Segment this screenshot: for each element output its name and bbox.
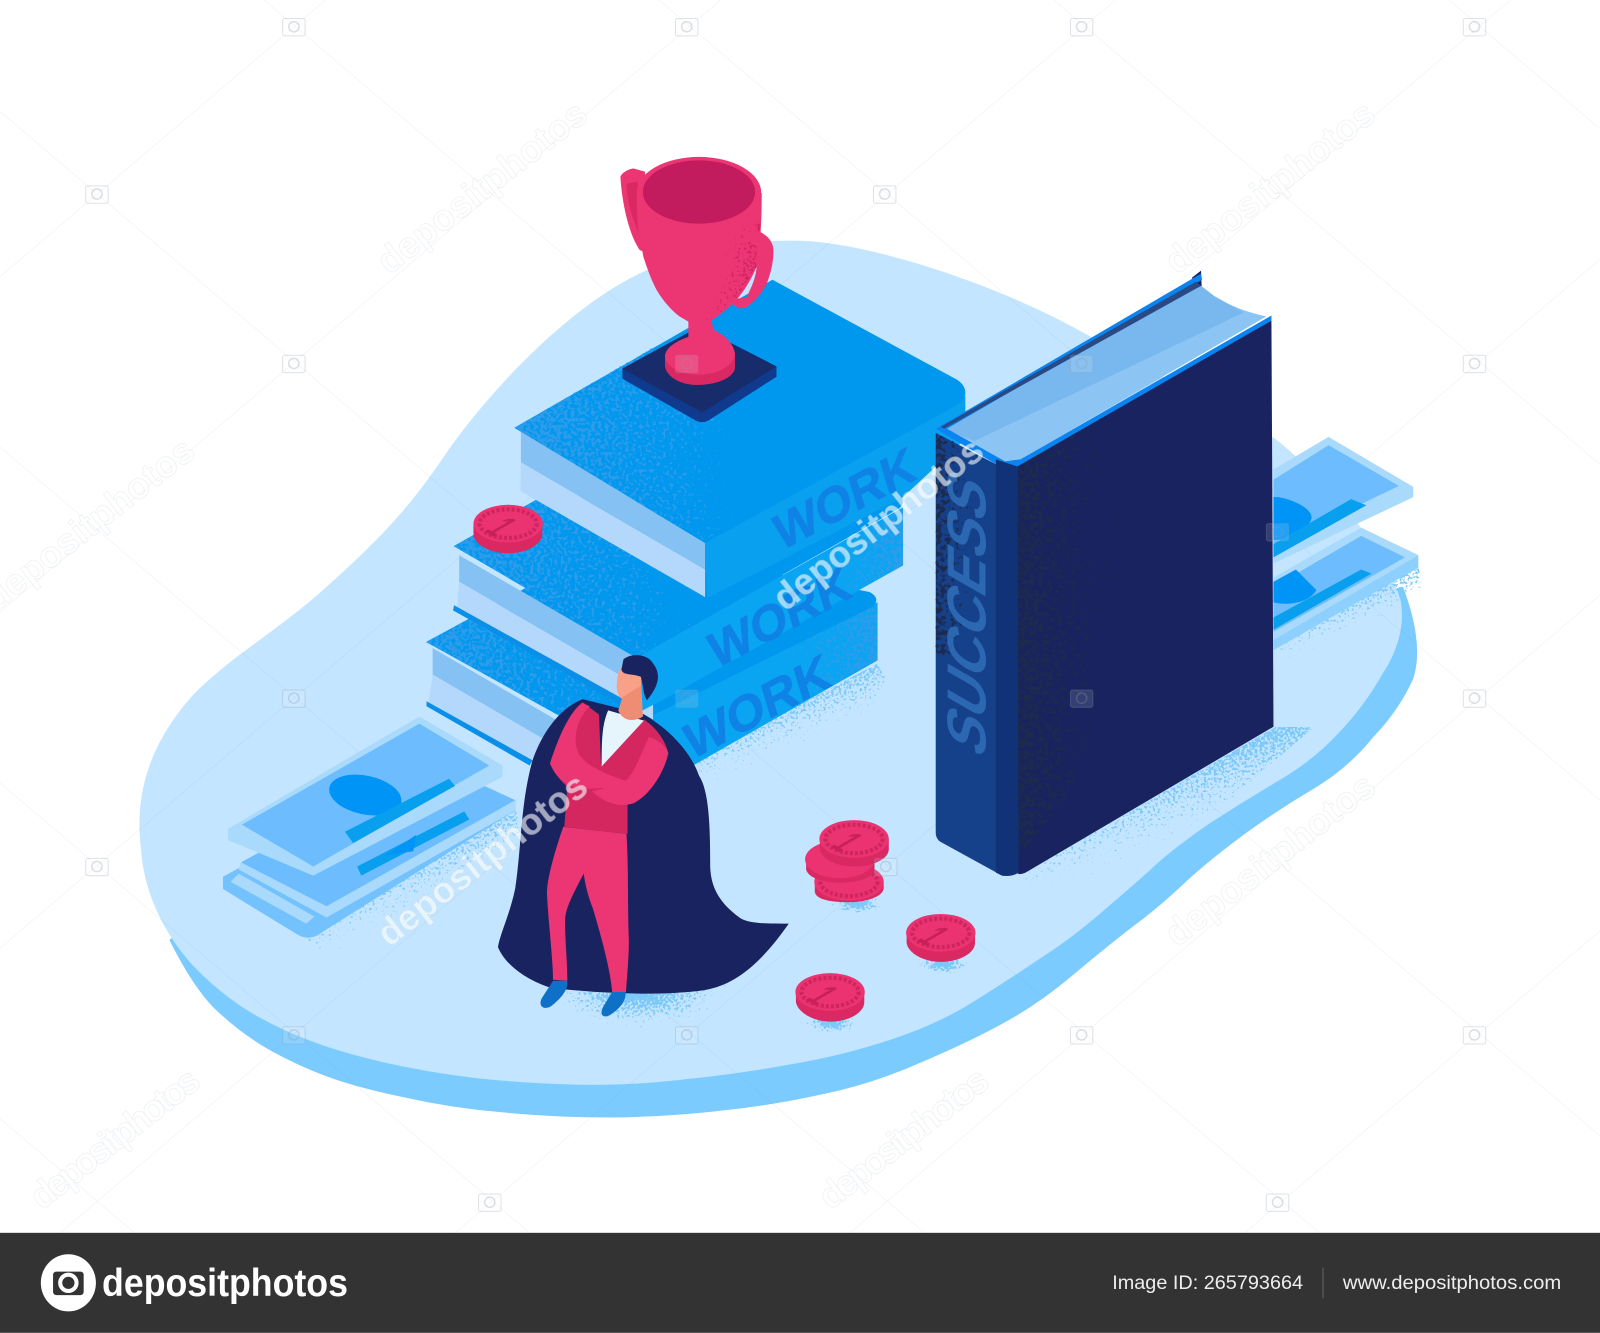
cup [637, 193, 762, 385]
back cover corner [1192, 271, 1202, 296]
neck and face [617, 668, 643, 720]
arm left [550, 703, 634, 803]
coin bottom: 1 [796, 980, 848, 1010]
watermark text: depositphotos [1157, 765, 1383, 954]
arm right [592, 737, 668, 805]
coin on middle book: 1 [475, 512, 527, 542]
watermark text: depositphotos [22, 1059, 208, 1217]
cover edge [936, 274, 1271, 469]
shirt [602, 710, 644, 766]
trophy plate [622, 327, 777, 422]
middle bill [239, 760, 515, 918]
superhero businessman [498, 655, 789, 1016]
spine [936, 433, 1018, 876]
spine label SUCCESS: SUCCESS [937, 459, 998, 767]
coin bottom [795, 973, 865, 1022]
money stack left [223, 716, 515, 938]
book stack [426, 280, 965, 786]
coin stack: 1 [821, 827, 873, 857]
background blob: upper layer [139, 241, 1402, 1085]
middle book [453, 490, 903, 720]
large SUCCESS book [936, 271, 1273, 876]
footer logo [41, 1254, 348, 1311]
footer logo: depositphotos [102, 1262, 348, 1305]
bill right upper [1273, 437, 1413, 563]
torso [550, 702, 668, 834]
handle left [620, 169, 653, 255]
coin right [906, 914, 976, 962]
page block [944, 286, 1266, 465]
footer image id: Image ID: 265793664 [1112, 1272, 1303, 1294]
coin stack [805, 820, 889, 902]
shoe left [541, 981, 567, 1008]
cape [498, 699, 789, 994]
coin on middle book [473, 505, 543, 553]
top book [514, 280, 965, 598]
watermark text: depositphotos [810, 1059, 997, 1217]
legs [547, 827, 629, 992]
lower bill [223, 776, 515, 938]
spine label WORK: WORK [768, 437, 921, 562]
watermark camera icons [86, 19, 1486, 1211]
front cover [1017, 321, 1273, 874]
watermark text: depositphotos [765, 429, 991, 619]
lower book [426, 541, 878, 786]
money stack right [1273, 437, 1418, 650]
footer url: www.depositphotos.com [1342, 1272, 1561, 1294]
spine label WORK: WORK [678, 644, 836, 771]
watermark text [0, 93, 1383, 1217]
light sliver through handle [740, 270, 752, 294]
watermark text: depositphotos [1157, 93, 1383, 282]
background blob: lower layer [169, 587, 1417, 1118]
trophy [620, 157, 773, 385]
watermark text: depositphotos [369, 765, 595, 954]
bill right lower [1273, 528, 1418, 650]
handle right [729, 232, 773, 308]
coin right: 1 [907, 921, 959, 951]
top bill [228, 716, 503, 876]
spine label WORK: WORK [703, 555, 857, 680]
stipple shadows on ground [306, 566, 1423, 1041]
cup stipple [668, 220, 760, 322]
watermark text: depositphotos [369, 93, 595, 282]
shoe right [602, 992, 626, 1016]
footer bar [0, 1233, 1600, 1333]
hair [621, 655, 658, 700]
